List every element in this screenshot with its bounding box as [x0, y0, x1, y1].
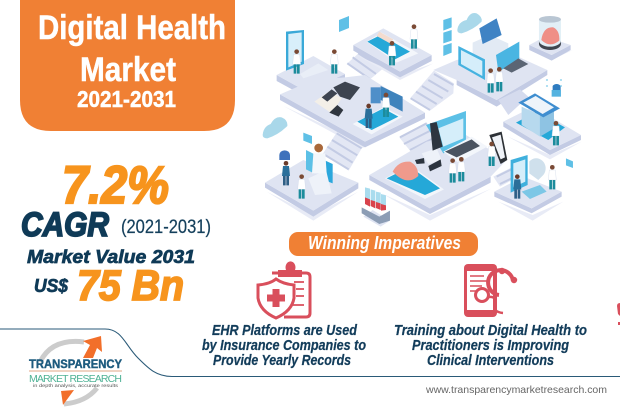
text: training about digital health: Clinical Interventions — [427, 353, 554, 369]
logo mark — [40, 336, 102, 405]
text: training about digital health: Practitioners is Improving — [412, 338, 569, 354]
logo: in depth analysis, accurate results — [33, 383, 119, 388]
stairs: centre — [410, 71, 454, 111]
text: training about digital health — [394, 323, 587, 369]
market value label: Market Value 2031 — [27, 247, 195, 267]
icon: partial right edge — [617, 303, 620, 325]
platform: large left — [280, 75, 427, 148]
title text: Digital Health — [38, 9, 226, 47]
platform: top right — [433, 18, 547, 107]
market value amount: 75 Bn — [77, 262, 184, 310]
footer curve line — [0, 329, 620, 376]
title text — [38, 9, 226, 112]
clouds — [263, 13, 482, 138]
platform: upper left small — [277, 30, 345, 97]
icon: clipboard with medical shield — [258, 261, 310, 318]
logo: MARKET RESEARCH — [29, 373, 122, 385]
title banner — [20, 0, 235, 131]
stairs: lower left — [323, 133, 362, 171]
text: EHR platforms: Provide Yearly Records — [213, 353, 351, 369]
text: EHR platforms — [202, 323, 366, 369]
winning imperatives pill: Winning Imperatives — [308, 233, 461, 253]
CAGR statistics — [21, 156, 211, 310]
platform: top centre — [353, 24, 433, 80]
isometric digital health illustration — [263, 13, 582, 227]
market value currency: US$ — [34, 276, 69, 296]
title text: 2021-2031 — [77, 86, 176, 112]
stairs: upper left — [347, 53, 383, 79]
stairs: lower centre — [399, 123, 518, 187]
text: training about digital health: Training about Digital Health to — [394, 323, 587, 339]
platform: centre bottom — [369, 111, 507, 221]
platform: shop — [503, 93, 582, 159]
logo: TRANSPARENCY — [29, 359, 122, 371]
text: EHR platforms: by Insurance Companies to — [202, 338, 366, 354]
title text: Market — [80, 51, 176, 89]
platform: bottom right — [494, 155, 563, 221]
logo — [29, 336, 122, 405]
stairs: right — [498, 89, 528, 115]
website url: www.transparencymarketresearch.com — [425, 384, 607, 396]
platform: capsule — [529, 16, 573, 61]
text: EHR platforms: EHR Platforms are Used — [212, 323, 358, 339]
floating icons — [303, 16, 573, 168]
CAGR period: (2021-2031) — [121, 217, 211, 238]
drone icon — [546, 80, 566, 97]
CAGR label: CAGR — [21, 206, 109, 244]
test tubes — [362, 187, 390, 227]
CAGR value: 7.2% — [62, 156, 169, 215]
platform: bottom left — [265, 144, 358, 221]
icon: smartphone with stethoscope — [464, 264, 517, 317]
